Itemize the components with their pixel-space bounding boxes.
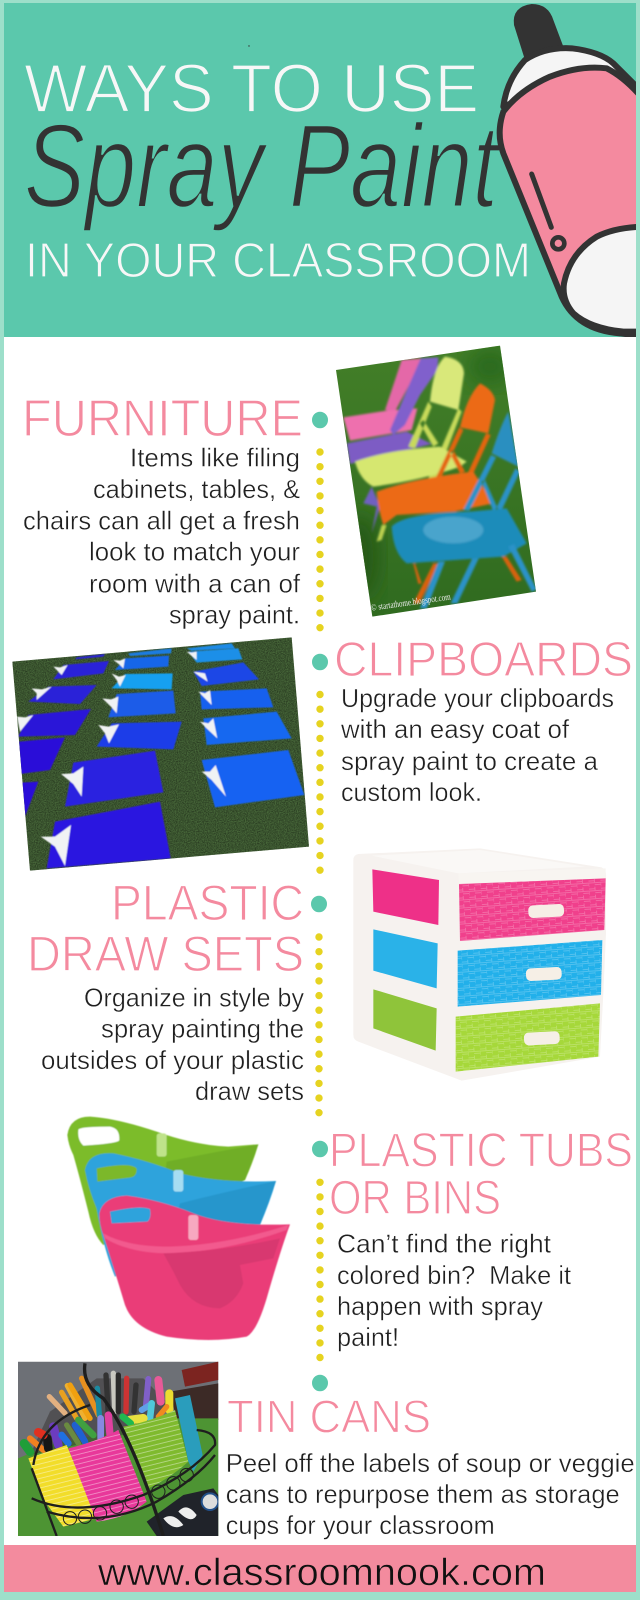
heading: plastic draw sets: DRAW SETS: [27, 926, 304, 982]
header banner: [4, 3, 640, 337]
heading: plastic tubs or bins: OR BINS: [329, 1172, 501, 1225]
photo: plastic drawer set: [353, 848, 606, 1081]
text: clipboards description: [340, 683, 614, 807]
text: tin cans description: cups for your classroom: [226, 1510, 495, 1540]
timeline: dotted line with nodes: [311, 412, 328, 1391]
text: furniture description: chairs can all get a fresh: [23, 506, 300, 536]
text: furniture description: look to match your: [89, 537, 300, 567]
text: furniture description: Items like filing: [130, 442, 300, 472]
text: clipboards description: spray paint to create a: [341, 746, 599, 776]
text: draw sets description: [41, 983, 304, 1106]
text: furniture description: room with a can of: [89, 568, 301, 598]
text: tin cans description: [226, 1448, 635, 1540]
text: tubs description: Can’t find the right: [337, 1229, 552, 1259]
text: furniture description: spray paint.: [169, 599, 300, 629]
photo: stacked plastic tubs: [67, 1117, 290, 1340]
website url: www.classroomnook.com: [97, 1552, 546, 1594]
text: tubs description: [337, 1229, 572, 1352]
section: clipboards: [5, 630, 633, 875]
text: draw sets description: draw sets: [195, 1076, 304, 1106]
heading: plastic draw sets: [27, 875, 304, 982]
text: tin cans description: cans to repurpose them as storage: [226, 1479, 620, 1509]
text: furniture description: [23, 442, 301, 629]
text: clipboards description: with an easy coat of: [340, 714, 570, 744]
section: plastic tubs or bins: [67, 1117, 633, 1352]
icon: spray can: [500, 4, 640, 337]
section: furniture: [22, 340, 550, 629]
heading: tin cans: TIN CANS: [227, 1391, 431, 1443]
photo: blue painted clipboards on grass: [5, 630, 315, 875]
footer band: [4, 1545, 636, 1594]
text: draw sets description: outsides of your plastic: [41, 1045, 304, 1075]
heading: plastic tubs or bins: [329, 1125, 633, 1225]
title line 1: WAYS TO USE: [24, 50, 479, 127]
text: clipboards description: custom look.: [341, 777, 482, 807]
section: plastic draw sets: [27, 848, 606, 1106]
text: tubs description: happen with spray: [337, 1291, 543, 1321]
text: clipboards description: Upgrade your clipboards: [341, 683, 614, 713]
text: draw sets description: spray painting the: [101, 1014, 304, 1044]
photo: painted folding chairs: [336, 346, 536, 616]
text: tin cans description: Peel off the labels of soup or veggie: [226, 1448, 635, 1478]
banner background: [4, 3, 636, 337]
text: draw sets description: Organize in style by: [84, 983, 304, 1013]
white content area: [4, 337, 636, 1545]
title line 3: IN YOUR CLASSROOM: [25, 234, 531, 288]
heading: plastic draw sets: PLASTIC: [111, 875, 304, 931]
text: tubs description: paint!: [337, 1322, 399, 1352]
heading: furniture: FURNITURE: [22, 390, 303, 448]
title line 2 script: Spray Paint: [24, 100, 502, 233]
text: tubs description: colored bin? Make it: [337, 1260, 572, 1290]
photo: painted tin can organizer: [18, 1362, 218, 1536]
section: tin cans: [18, 1362, 635, 1540]
photo watermark: © startathome.blogspot.com: [371, 592, 452, 614]
text: furniture description: cabinets, tables, &: [93, 474, 300, 504]
speck: [248, 45, 250, 47]
